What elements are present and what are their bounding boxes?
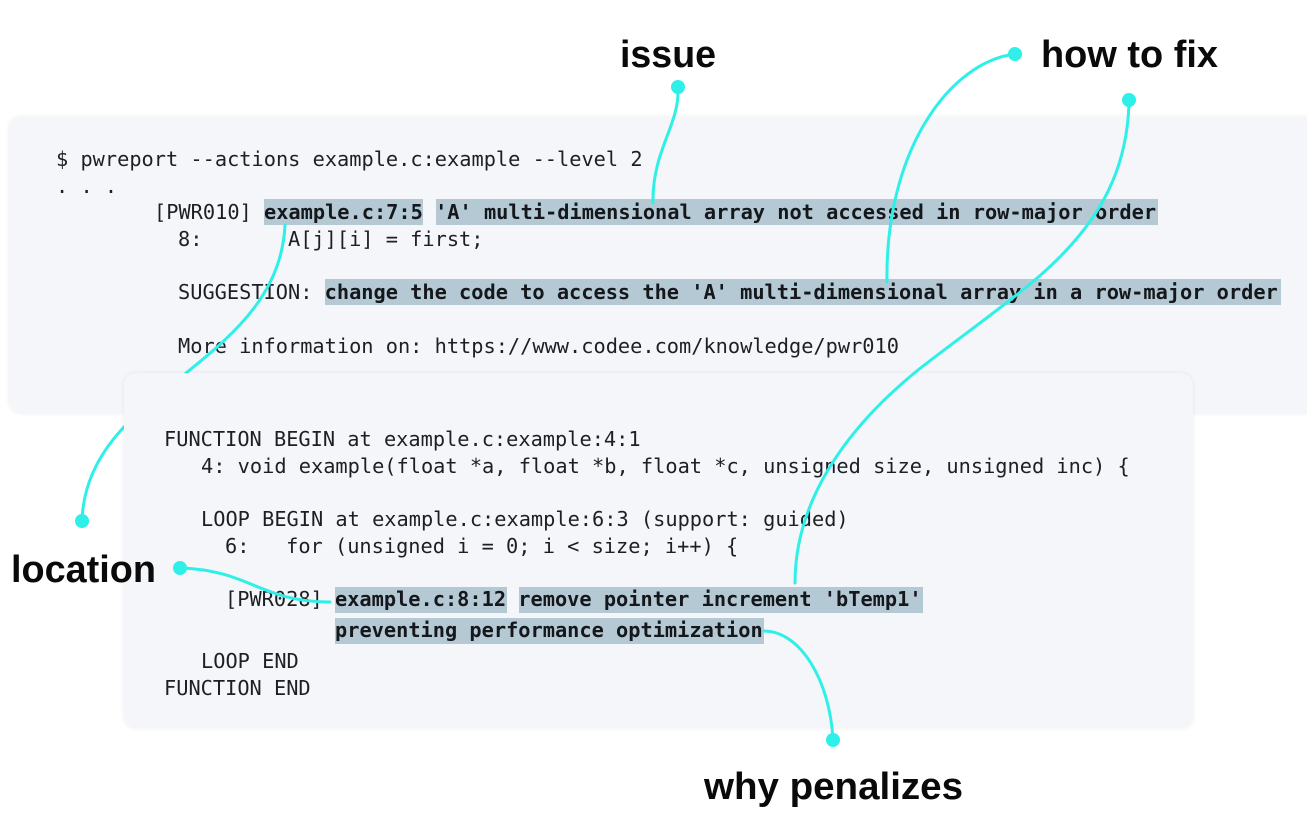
highlight: suggestion <box>325 279 1281 305</box>
connector: issue label <box>653 87 678 203</box>
text: source line 8: 8: A[j][i] = first; <box>178 227 484 251</box>
connector dot: why penalizes <box>826 733 840 747</box>
text: more information line: More information on: https://www.codee.com/knowledge/pwr010 <box>178 334 899 358</box>
text: function begin: FUNCTION BEGIN at example.c:example:4:1 <box>164 427 641 451</box>
text: source line 4: 4: void example(float *a, float *b, float *c, unsigned size, unsigned inc) { <box>201 454 1130 478</box>
connector dot: issue <box>671 80 685 94</box>
connector dot: how to fix upper <box>1008 47 1022 61</box>
text: PWR010 line: [PWR010] example.c:7:5 'A' multi-dimensional array not accessed in row-major order <box>154 200 1156 224</box>
connector: first how to fix label <box>887 54 1015 282</box>
connector dot: location lower <box>173 561 187 575</box>
label: how to fix: how to fix <box>1041 34 1218 76</box>
panel: pwreport actions output <box>9 117 1307 413</box>
text: suggestion line: SUGGESTION: change the code to access the 'A' multi-dimensional array in a row-major order <box>178 280 1278 304</box>
text: why penalizes line: preventing performance optimization <box>335 618 763 642</box>
highlight: PWR010 location and issue <box>264 199 1158 225</box>
connector: first location label to example.c:7:5 <box>82 225 285 521</box>
text: ellipsis: . . . <box>56 174 117 198</box>
text: function end: FUNCTION END <box>164 676 311 700</box>
text: loop begin: LOOP BEGIN at example.c:example:6:3 (support: guided) <box>201 507 849 531</box>
connector: second location label <box>180 568 330 602</box>
connector: second how to fix label <box>795 100 1129 583</box>
panel: function loop report <box>124 373 1193 728</box>
text: command line: $ pwreport --actions example.c:example --level 2 <box>56 147 643 171</box>
connector dot: how to fix lower <box>1122 93 1136 107</box>
label: location: location <box>11 549 156 591</box>
connector dot: location upper <box>75 514 89 528</box>
text: source line 6: 6: for (unsigned i = 0; i < size; i++) { <box>225 534 738 558</box>
label: why penalizes: why penalizes <box>703 766 963 808</box>
highlight: PWR028 location and issue <box>335 587 923 644</box>
connector: why penalizes label <box>764 631 833 740</box>
text: PWR028 line: [PWR028] example.c:8:12 remove pointer increment 'bTemp1' <box>225 587 922 611</box>
text: loop end: LOOP END <box>201 649 299 673</box>
label: issue: issue <box>620 34 716 76</box>
